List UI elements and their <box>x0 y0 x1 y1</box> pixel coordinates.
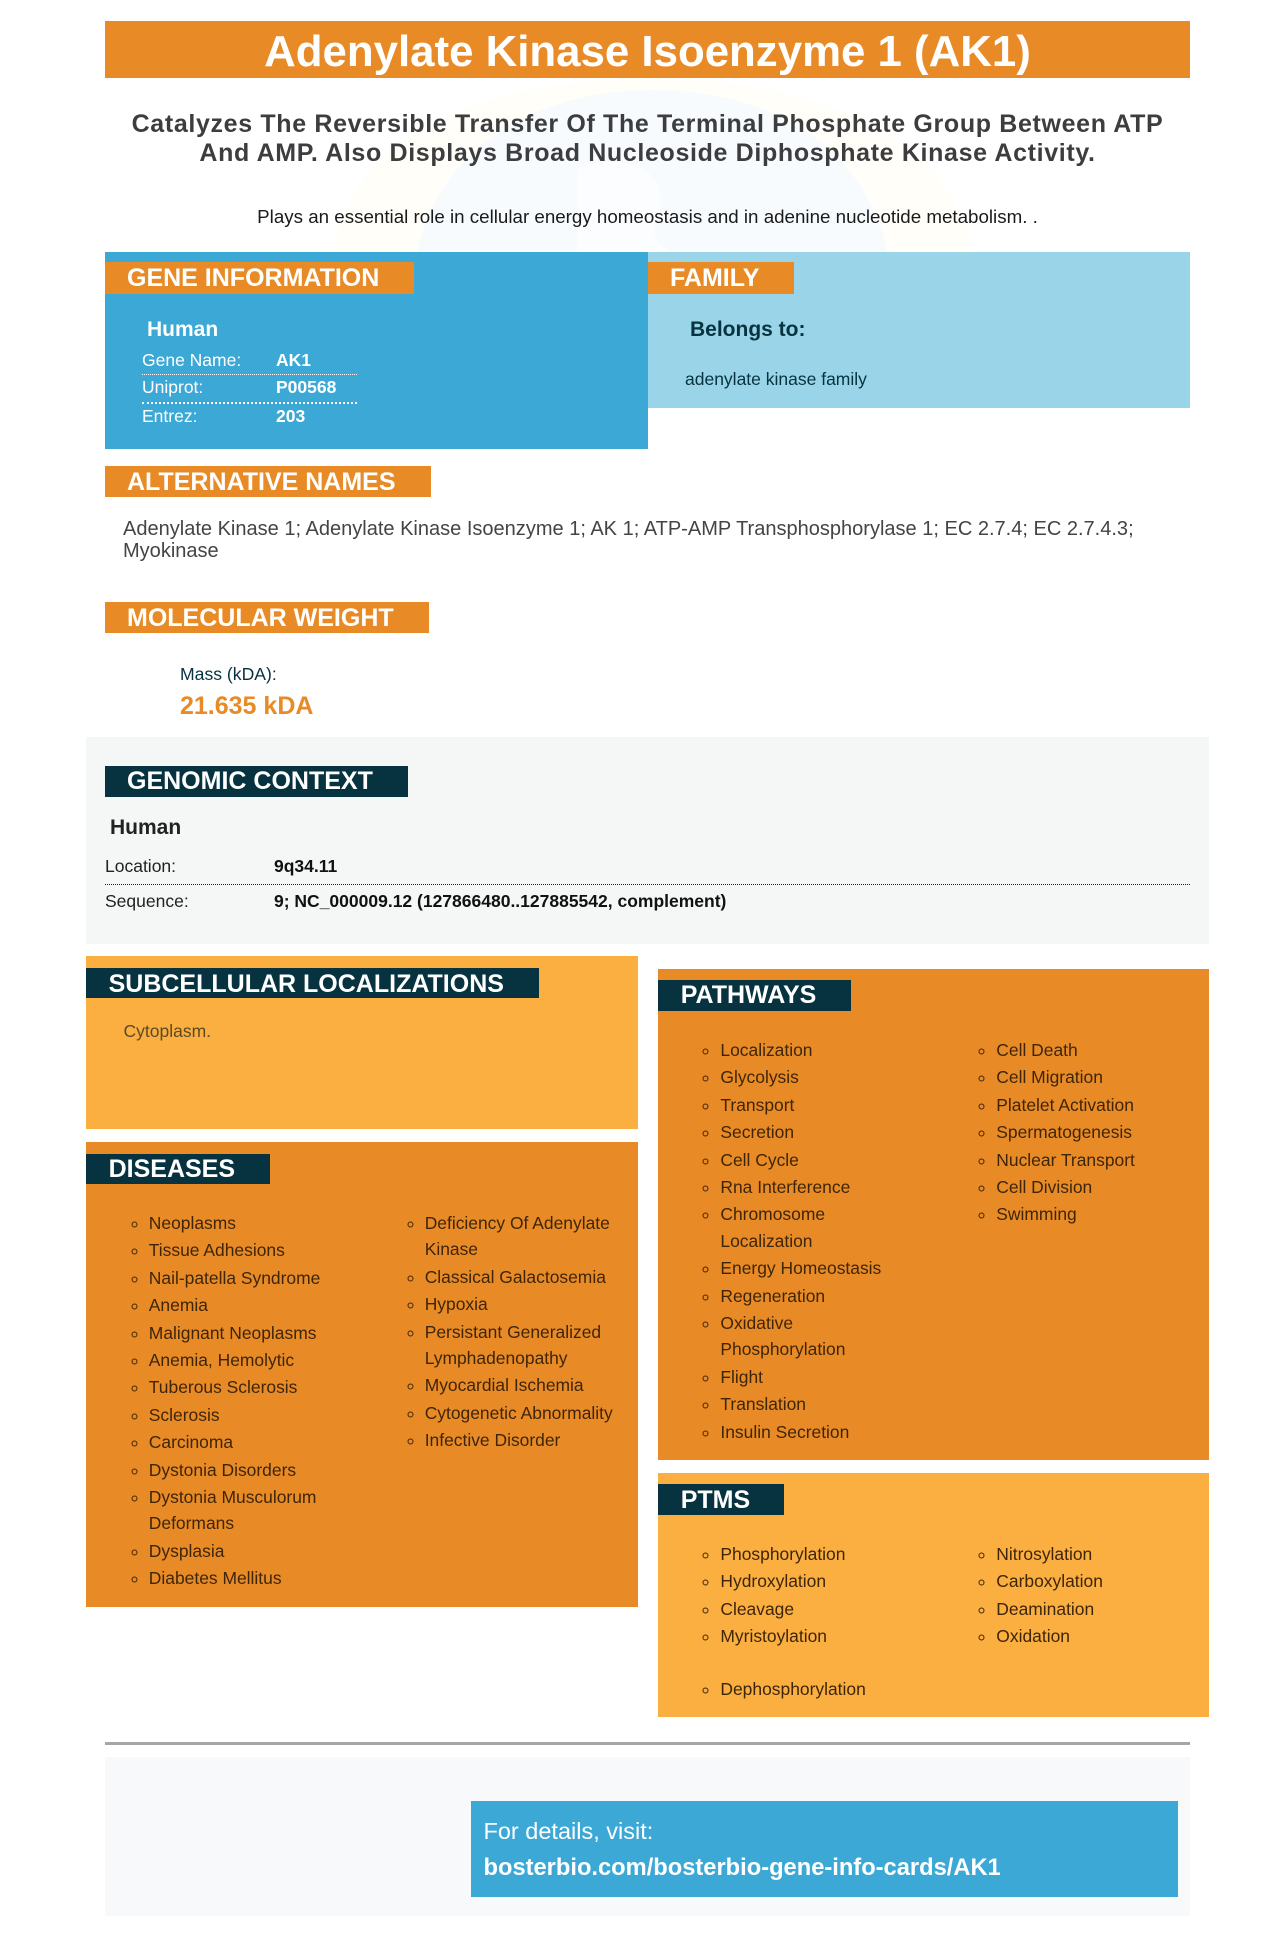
ptm list: column 1: Myristoylation <box>720 1626 827 1646</box>
disease list: column 1: Sclerosis <box>149 1405 220 1425</box>
disease list: column 1: Anemia, Hemolytic <box>149 1350 294 1370</box>
pathway list: column 2: Cell Migration <box>996 1067 1103 1087</box>
heading: ptms <box>658 1484 784 1515</box>
disease list: column 1: Dystonia Musculorum <box>149 1487 316 1507</box>
pathway list: column 1: Secretion <box>720 1122 794 1142</box>
heading: ptms: PTMS <box>681 1486 750 1514</box>
mass value: 21.635 kDA <box>180 692 313 720</box>
heading: pathways: PATHWAYS <box>681 981 816 1009</box>
ptm list: column 2: Oxidation <box>996 1626 1070 1646</box>
disease list: column 2: Hypoxia <box>425 1294 488 1314</box>
ptm list: column 1: Cleavage <box>720 1599 794 1619</box>
panel: ptms <box>658 1473 1209 1717</box>
pathway list: column 1: Regeneration <box>720 1286 825 1306</box>
heading: diseases <box>86 1154 270 1184</box>
species label: Human <box>110 816 181 839</box>
heading: molecular weight: MOLECULAR WEIGHT <box>127 604 394 632</box>
background watermark logo <box>0 0 1288 260</box>
pathway list: column 2: Swimming <box>996 1204 1077 1224</box>
heading: alternative names: ALTERNATIVE NAMES <box>127 468 396 496</box>
url: bosterbio.com/bosterbio-gene-info-cards/AK1 <box>484 1855 1001 1881</box>
pathway list: column 1: Localization <box>720 1231 812 1251</box>
disease list: column 1: Deformans <box>149 1513 234 1533</box>
pathway list: column 1: Energy Homeostasis <box>720 1258 881 1278</box>
sequence row: 9; NC_000009.12 (127866480..127885542, complement) <box>274 891 726 911</box>
ptm list: column 1: Phosphorylation <box>720 1544 845 1564</box>
disease list: column 1: Carcinoma <box>149 1432 233 1452</box>
pathway list: column 1: Chromosome <box>720 1204 825 1224</box>
pathway list: column 1: Localization <box>720 1040 812 1060</box>
pathway list: column 2: Platelet Activation <box>996 1095 1134 1115</box>
disease list: column 1: Dysplasia <box>149 1541 224 1561</box>
disease list: column 1: Dystonia Disorders <box>149 1460 296 1480</box>
gene name row: Gene Name: <box>142 350 241 370</box>
pathway list: column 1: Oxidative <box>720 1313 793 1333</box>
disease list: column 1: Anemia <box>149 1295 208 1315</box>
description: Plays an essential role in cellular energy homeostasis and in adenine nucleotide metabolism. . <box>257 206 1038 227</box>
disease list: column 2: Classical Galactosemia <box>425 1267 606 1287</box>
pathway list: column 1: Cell Cycle <box>720 1150 799 1170</box>
ptm list: column 2: Nitrosylation <box>996 1544 1092 1564</box>
disease list: column 2: Cytogenetic Abnormality <box>425 1403 613 1423</box>
heading: family <box>648 262 794 294</box>
subtitle <box>132 110 1163 167</box>
location row: 9q34.11 <box>274 856 337 876</box>
disease list: column 2: Kinase <box>425 1239 478 1259</box>
panel: diseases <box>86 1142 638 1607</box>
gene name row: AK1 <box>276 350 311 370</box>
alternative names text: Adenylate Kinase 1; Adenylate Kinase Isoenzyme 1; AK 1; ATP-AMP Transphosphorylase 1; EC 2.7.4; EC 2.7.4.3; <box>123 518 1134 540</box>
ptm list: column 2: Deamination <box>996 1599 1094 1619</box>
disease list: column 1: Neoplasms <box>149 1213 236 1233</box>
disease list: column 2: Infective Disorder <box>425 1430 560 1450</box>
uniprot row: Uniprot: <box>142 377 203 397</box>
disease list: column 2: Lymphadenopathy <box>425 1348 568 1368</box>
gene name row <box>142 349 357 375</box>
subtitle: And AMP. Also Displays Broad Nucleoside Diphosphate Kinase Activity. <box>199 139 1096 167</box>
pathway list: column 1: Rna Interference <box>720 1177 850 1197</box>
mass label: Mass (kDA): <box>180 664 277 684</box>
pathway list: column 2: Cell Death <box>996 1040 1078 1060</box>
pathway list: column 1 <box>702 1040 881 1442</box>
uniprot row: P00568 <box>276 377 336 397</box>
entrez row: 203 <box>276 406 305 426</box>
title banner <box>105 21 1190 78</box>
disease list: column 1: Nail-patella Syndrome <box>149 1268 320 1288</box>
disease list: column 1: Tissue Adhesions <box>149 1240 285 1260</box>
heading: genomic context: GENOMIC CONTEXT <box>127 767 373 795</box>
heading: diseases: DISEASES <box>109 1154 235 1182</box>
panel: genomic context <box>86 737 1209 944</box>
callout: details link <box>471 1801 1178 1897</box>
ptm list: column 1: Hydroxylation <box>720 1571 826 1591</box>
disease list: column 2 <box>408 1213 613 1450</box>
pathway list: column 1: Glycolysis <box>720 1067 799 1087</box>
belongs to label: Belongs to: <box>690 318 806 341</box>
location row: Location: <box>105 856 176 876</box>
entrez row <box>142 406 305 426</box>
family name: adenylate kinase family <box>685 369 867 389</box>
disease list: column 1: Tuberous Sclerosis <box>149 1377 297 1397</box>
ptm list: column 2 <box>978 1544 1103 1646</box>
uniprot row <box>142 376 357 404</box>
disease list: column 1 <box>132 1213 320 1588</box>
location row <box>105 855 1190 885</box>
entrez row: Entrez: <box>142 406 197 426</box>
panel: subcellular localizations <box>86 956 638 1128</box>
disease list: column 2: Deficiency Of Adenylate <box>425 1213 610 1233</box>
pathway list: column 2: Nuclear Transport <box>996 1150 1135 1170</box>
heading: gene information: GENE INFORMATION <box>127 264 379 292</box>
localization text: Cytoplasm. <box>124 1021 211 1041</box>
title banner: Adenylate Kinase Isoenzyme 1 (AK1) <box>264 27 1031 76</box>
pathway list: column 2: Cell Division <box>996 1177 1092 1197</box>
disease list: column 1: Diabetes Mellitus <box>149 1568 282 1588</box>
panel: footer <box>105 1757 1190 1916</box>
ptm list: column 1 <box>702 1544 845 1646</box>
ptm list: column 2: Carboxylation <box>996 1571 1103 1591</box>
heading: subcellular localizations: SUBCELLULAR LOCALIZATIONS <box>109 970 504 998</box>
pathway list: column 2: Spermatogenesis <box>996 1122 1132 1142</box>
sequence row: Sequence: <box>105 891 189 911</box>
pathway list: column 1: Transport <box>720 1095 794 1115</box>
panel: pathways <box>658 969 1209 1460</box>
alternative names text <box>123 518 1134 562</box>
visit label: For details, visit: <box>484 1818 653 1844</box>
pathway list: column 2 <box>978 1040 1135 1224</box>
disease list: column 2: Persistant Generalized <box>425 1322 601 1342</box>
subtitle: Catalyzes The Reversible Transfer Of The Terminal Phosphate Group Between ATP <box>132 110 1163 138</box>
disease list: column 2: Myocardial Ischemia <box>425 1375 584 1395</box>
pathway list: column 1: Flight <box>720 1367 763 1387</box>
heading: pathways <box>658 980 851 1011</box>
alternative names text: Myokinase <box>123 540 219 562</box>
pathway list: column 1: Translation <box>720 1394 806 1414</box>
pathway list: column 1: Phosphorylation <box>720 1339 845 1359</box>
heading: family: FAMILY <box>670 264 759 292</box>
species label: Human <box>147 318 218 341</box>
disease list: column 1: Malignant Neoplasms <box>149 1323 316 1343</box>
panel: family <box>648 252 1190 408</box>
ptm list: last item: Dephosphorylation <box>720 1679 866 1699</box>
pathway list: column 1: Insulin Secretion <box>720 1422 849 1442</box>
panel: gene information <box>105 252 648 449</box>
